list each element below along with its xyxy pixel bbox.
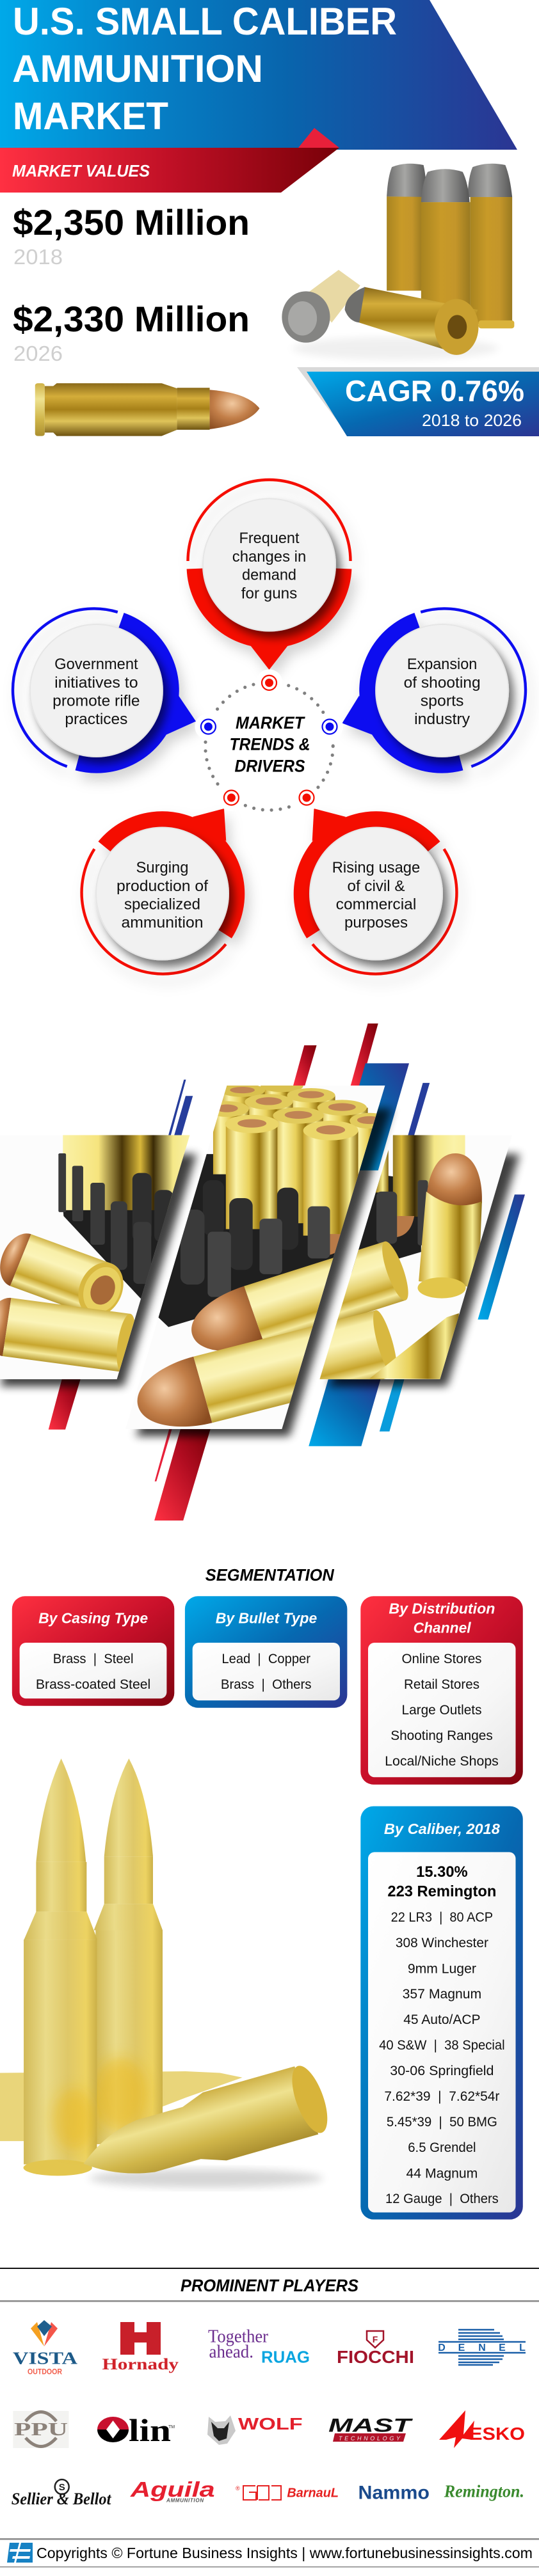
driver: surging production: specialized: [124, 896, 200, 913]
market value 2026: 2026: [13, 342, 63, 365]
card: by distribution channel: Channel: [414, 1620, 471, 1636]
card: by caliber 2018: [360, 1806, 523, 2220]
logo: Mesko: ESKO: [469, 2424, 525, 2444]
logo: Vista Outdoor: [13, 2320, 78, 2376]
card: by caliber 2018: 9mm Luger: [408, 1961, 476, 1976]
logo: Denel: [438, 2330, 526, 2365]
driver: frequent changes: Frequent: [239, 530, 300, 547]
logo: Denel: E: [458, 2343, 465, 2353]
standing bullet right: [417, 1153, 482, 1299]
driver: expansion of shooting sports: of shooting: [404, 674, 481, 691]
card: by bullet type: By Bullet Type: [216, 1610, 317, 1627]
card: by bullet type: Lead | Copper: [221, 1652, 310, 1666]
logo: Fiocchi: FIOCCHI: [337, 2347, 414, 2367]
card: by caliber 2018: 7.62*39 | 7.62*54r: [384, 2089, 499, 2104]
title heading: MARKET: [13, 95, 168, 138]
market value 2026: $2,330 Million: [13, 299, 250, 339]
card: by caliber 2018: 357 Magnum: [403, 1987, 481, 2002]
title banner: [0, 0, 517, 150]
rear standing cartridge: [93, 1758, 163, 2144]
card: by caliber 2018: 30-06 Springfield: [390, 2064, 494, 2078]
logo: Sellier & Bellot: [12, 2479, 111, 2508]
driver: rising usage: [302, 809, 456, 974]
logo: Denel: N: [478, 2343, 486, 2353]
photo: lead-tipped cartridges: [282, 164, 514, 360]
driver: frequent changes: demand: [242, 567, 296, 584]
central heading: MARKET: [236, 713, 305, 732]
driver: surging production: ammunition: [122, 914, 204, 931]
driver: surging production: Surging: [136, 859, 188, 876]
lying bullet centre top: [191, 1241, 408, 1351]
driver: frequent changes: changes in: [232, 548, 306, 565]
logo: Olin: lin: [129, 2412, 171, 2448]
logo: Olin: TM: [168, 2425, 175, 2430]
card: by distribution channel: Local/Niche Shops: [385, 1754, 499, 1769]
driver: rising usage: purposes: [344, 914, 408, 931]
logo: Hornady: [102, 2322, 179, 2373]
logo: Sellier & Bellot: S: [59, 2482, 65, 2493]
logo: RUAG: [208, 2327, 310, 2366]
panel: market trends and drivers: [13, 480, 526, 974]
logo: Olin: [97, 2412, 175, 2448]
card: by caliber 2018: 44 Magnum: [406, 2166, 478, 2181]
photo: rifle cartridges: [0, 1758, 335, 2198]
market value 2018: [13, 202, 250, 269]
card: by distribution channel: Large Outlets: [402, 1703, 481, 1718]
icon: Fortune Business Insights logo: [7, 2543, 33, 2563]
logo: Denel: D: [438, 2343, 446, 2353]
driver: government initiatives: initiatives to: [54, 674, 138, 691]
card: by distribution channel: Shooting Ranges: [390, 1728, 493, 1743]
card: by caliber 2018: 5.45*39 | 50 BMG: [387, 2115, 497, 2130]
card: by distribution channel: By Distribution: [389, 1600, 495, 1617]
panel drop shadows: [0, 1109, 520, 1436]
driver: government initiatives: practices: [65, 711, 127, 728]
section heading: segmentation: SEGMENTATION: [205, 1565, 335, 1584]
logo: Wolf: [207, 2414, 303, 2445]
logo: Wolf: WOLF: [238, 2414, 303, 2433]
driver: government initiatives: Government: [54, 656, 138, 673]
card: by caliber 2018: 45 Auto/ACP: [403, 2012, 481, 2027]
driver: surging production: production of: [117, 878, 208, 895]
central dotted ring with markers: [195, 669, 343, 811]
logo: Vista Outdoor: VISTA: [13, 2349, 78, 2368]
market values ribbon: [0, 128, 339, 193]
driver: frequent changes: for guns: [241, 585, 297, 602]
logo: Mast Technology: TECHNOLOGY: [339, 2435, 401, 2442]
bullets scene clipped to panels: [0, 1086, 508, 1429]
bullet tip bottom right: [369, 1313, 459, 1379]
lying bullet left bottom: [0, 1295, 138, 1373]
logo: RUAG: RUAG: [261, 2347, 310, 2366]
card: by caliber 2018: By Caliber, 2018: [384, 1821, 500, 1837]
rack posts: [58, 1153, 428, 1297]
card: by casing type: Brass-coated Steel: [36, 1677, 150, 1692]
card: by caliber 2018: 12 Gauge | Others: [385, 2192, 499, 2206]
lying bullet centre large: [137, 1310, 396, 1426]
card: by caliber 2018: 223 Remington: [387, 1883, 496, 1900]
illustration: brass bullet: [35, 383, 259, 436]
card: by caliber 2018: 40 S&W | 38 Special: [379, 2038, 505, 2053]
standing brass cartridges: [205, 1080, 389, 1255]
card: by distribution channel: [360, 1596, 523, 1785]
card: by bullet type: [185, 1596, 347, 1708]
card: by casing type: Brass | Steel: [53, 1652, 133, 1666]
card: by distribution channel: Retail Stores: [404, 1677, 479, 1692]
driver: rising usage: Rising usage: [332, 859, 420, 876]
front standing cartridge: [24, 1758, 97, 2176]
lying bullet left top: [0, 1233, 124, 1311]
card: by distribution channel: Online Stores: [402, 1652, 481, 1666]
lying cartridge: [72, 2062, 335, 2198]
logo: Vista Outdoor: OUTDOOR: [28, 2369, 63, 2376]
logo: Aguila: [130, 2477, 215, 2504]
logo: Mast Technology: MAST: [328, 2415, 414, 2437]
logo: Hornady: Hornady: [102, 2356, 179, 2373]
driver: government initiatives: [13, 608, 196, 766]
logo: Fiocchi: [337, 2331, 414, 2367]
card: by casing type: [12, 1596, 174, 1706]
card: by caliber 2018: 308 Winchester: [396, 1936, 488, 1950]
driver: surging production: [82, 809, 236, 974]
driver: government initiatives: promote rifle: [52, 692, 140, 710]
logo: PPU: [13, 2411, 68, 2448]
heading: prominent players: PROMINENT PLAYERS: [181, 2276, 358, 2295]
card: by bullet type: Brass | Others: [221, 1677, 312, 1692]
logo: RUAG: ahead.: [209, 2343, 253, 2362]
CAGR callout: 2018 to 2026: [422, 411, 522, 430]
market values ribbon: MARKET VALUES: [12, 161, 150, 180]
logo: Nammo: Nammo: [358, 2483, 430, 2504]
market value 2026: [13, 299, 250, 365]
logo: Barnaul: [236, 2485, 339, 2500]
title heading: U.S. SMALL CALIBER: [13, 0, 397, 43]
market value 2018: 2018: [13, 245, 63, 269]
card: by caliber 2018: 15.30%: [416, 1863, 468, 1881]
logo: Barnaul: BarnauL: [287, 2486, 339, 2500]
title heading: AMMUNITION: [12, 47, 263, 90]
driver: frequent changes: [188, 480, 351, 670]
driver: expansion of shooting sports: [342, 608, 526, 766]
logo: PPU: PPU: [14, 2420, 68, 2440]
logo: Mast Technology: [328, 2415, 414, 2442]
logo: RUAG: Together: [208, 2327, 269, 2347]
logo: Aguila: Aguila: [130, 2477, 215, 2501]
logo: Mesko: [439, 2410, 525, 2448]
logo: Aguila: AMMUNITION: [166, 2498, 204, 2504]
card: by caliber 2018: 22 LR3 | 80 ACP: [391, 1910, 493, 1925]
logo: Barnaul: ®: [236, 2485, 240, 2492]
driver: expansion of shooting sports: industry: [414, 711, 470, 728]
market value 2018: $2,350 Million: [13, 202, 250, 242]
footer: [0, 2538, 539, 2568]
title heading: [12, 0, 397, 138]
card: by caliber 2018: 6.5 Grendel: [408, 2140, 476, 2155]
driver: rising usage: commercial: [336, 896, 416, 913]
logo: Denel: L: [519, 2343, 526, 2353]
central heading: DRIVERS: [234, 756, 305, 775]
driver: rising usage: of civil &: [347, 878, 405, 895]
logo: Fiocchi: F: [373, 2334, 378, 2344]
photo collage: slanted panels of brass bullets: [0, 1023, 539, 1521]
logo: Remington: Remington.: [444, 2481, 524, 2501]
central heading: TRENDS &: [229, 734, 310, 754]
driver: expansion of shooting sports: Expansion: [407, 656, 477, 673]
CAGR callout: [297, 367, 539, 436]
CAGR callout: CAGR 0.76%: [345, 374, 524, 407]
driver: expansion of shooting sports: sports: [421, 692, 463, 710]
footer: Copyrights © Fortune Business Insights | www.fortunebusinessinsights.com: [36, 2545, 533, 2561]
accent stripes behind panels: [49, 1023, 525, 1521]
central heading: [229, 713, 310, 775]
logo: Sellier & Bellot: Sellier & Bellot: [12, 2490, 111, 2508]
card: by casing type: By Casing Type: [38, 1610, 148, 1627]
logo: Denel: E: [499, 2343, 506, 2353]
